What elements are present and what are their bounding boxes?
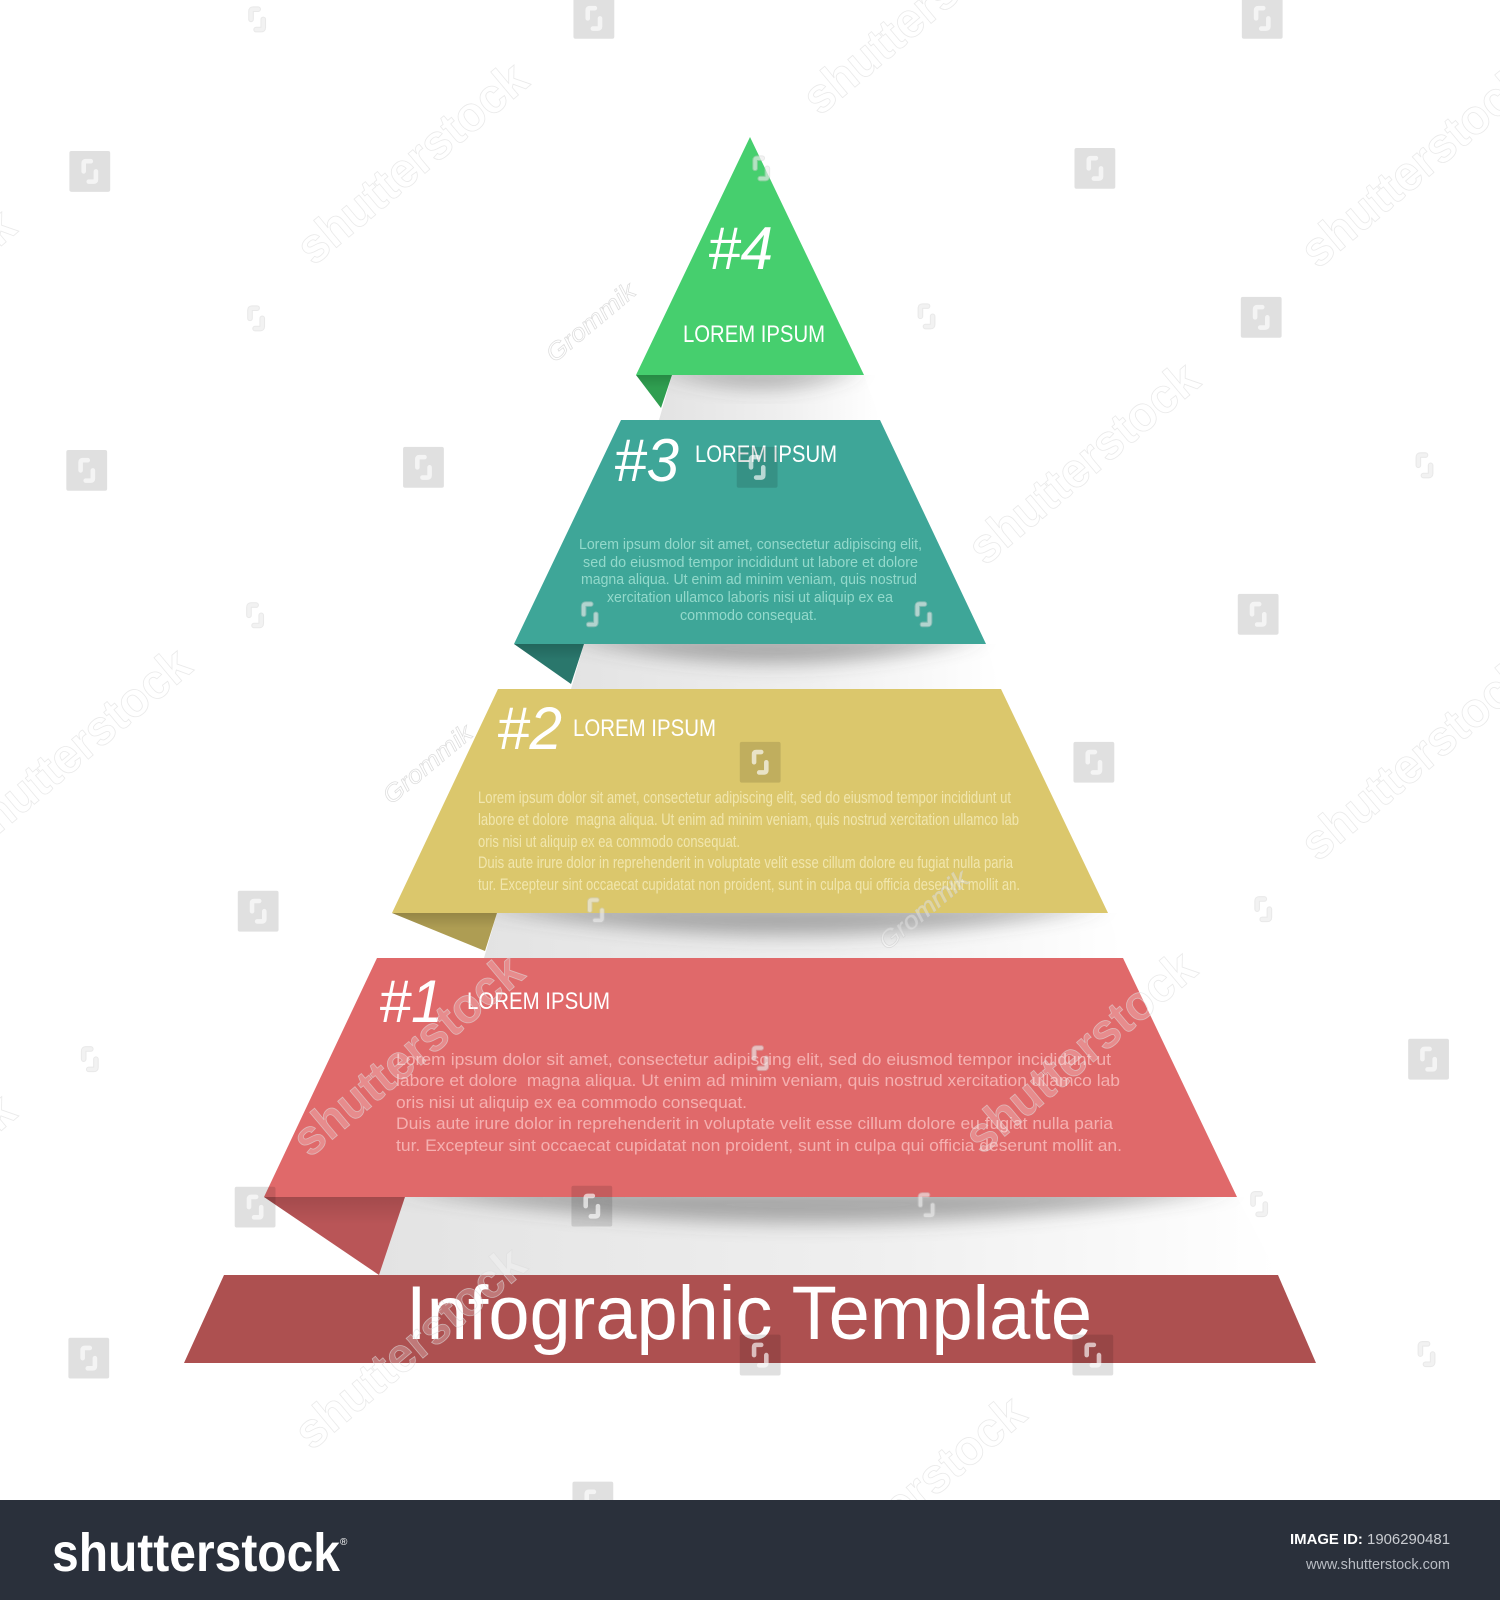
tier 2 paragraph: oris nisi ut aliquip ex ea commodo consequat. xyxy=(478,833,740,851)
tier 2 paragraph: labore et dolore magna aliqua. Ut enim ad minim veniam, quis nostrud xercitation ullamco lab xyxy=(478,811,1019,829)
tier 1 paragraph: Duis aute irure dolor in reprehenderit in voluptate velit esse cillum dolore eu fugiat nulla paria xyxy=(396,1114,1114,1133)
logo registered mark: ® xyxy=(340,1537,348,1548)
watermark layer: shutterstock xyxy=(282,943,535,1167)
tier 1 paragraph: labore et dolore magna aliqua. Ut enim ad minim veniam, quis nostrud xercitation ullamco lab xyxy=(396,1071,1120,1090)
tier 1 heading: LOREM IPSUM xyxy=(467,988,610,1015)
title: Infographic Template xyxy=(406,1271,1092,1356)
tier 3 paragraph: xercitation ullamco laboris nisi ut aliquip ex ea xyxy=(607,590,894,606)
footer bar xyxy=(0,1500,1500,1600)
watermark layer: Grommik xyxy=(378,718,479,810)
tier 3 paragraph: sed do eiusmod tempor incididunt ut labore et dolore xyxy=(583,555,918,571)
tier 2 paragraph: Duis aute irure dolor in reprehenderit in voluptate velit esse cillum dolore eu fugiat nulla paria xyxy=(478,854,1014,872)
watermark layer: shutterstock xyxy=(286,51,539,275)
panel: tier 2 yellow xyxy=(392,689,1123,958)
panel: tier 1 red xyxy=(264,958,1278,1275)
tier 4 number: #4 xyxy=(708,215,773,282)
tier 1 paragraph xyxy=(396,1050,1122,1155)
watermark layer: shutterstock xyxy=(284,1236,537,1460)
tier 4 heading: LOREM IPSUM xyxy=(683,321,825,348)
tier 2 heading: LOREM IPSUM xyxy=(573,715,716,742)
watermark layer: Grommik xyxy=(874,864,975,956)
title banner xyxy=(184,1271,1316,1363)
tier 1 paragraph: Lorem ipsum dolor sit amet, consectetur adipiscing elit, sed do eiusmod tempor incididunt ut xyxy=(396,1050,1111,1069)
tier 1 paragraph: oris nisi ut aliquip ex ea commodo consequat. xyxy=(396,1093,747,1112)
panel: tier 4 green apex xyxy=(636,137,880,420)
tier 3 heading: LOREM IPSUM xyxy=(695,441,837,468)
panel: tier 3 teal xyxy=(514,420,1000,689)
watermark layer: Grommik xyxy=(541,276,643,368)
tier 2 paragraph xyxy=(478,789,1020,894)
tier 3 paragraph: Lorem ipsum dolor sit amet, consectetur adipiscing elit, xyxy=(579,537,922,553)
tier 3 paragraph xyxy=(579,537,922,624)
tier 2 number: #2 xyxy=(497,695,562,762)
footer logo: shutterstock xyxy=(52,1523,341,1583)
tier 2 paragraph: Lorem ipsum dolor sit amet, consectetur adipiscing elit, sed do eiusmod tempor incididunt ut xyxy=(478,789,1011,807)
tier 1 number: #1 xyxy=(379,968,443,1035)
tier 3 paragraph: magna aliqua. Ut enim ad minim veniam, quis nostrud xyxy=(581,572,917,588)
tier 1 paragraph: tur. Excepteur sint occaecat cupidatat non proident, sunt in culpa qui officia deserunt mollit an. xyxy=(396,1136,1122,1155)
watermark layer: shutterstock xyxy=(958,351,1210,575)
website: www.shutterstock.com xyxy=(1305,1556,1450,1573)
tier 3 paragraph: commodo consequat. xyxy=(680,608,817,624)
watermark layer: shutterstock xyxy=(955,940,1207,1164)
image id: IMAGE ID: 1906290481 xyxy=(1290,1531,1450,1548)
tier 2 paragraph: tur. Excepteur sint occaecat cupidatat non proident, sunt in culpa qui officia deserunt mollit an. xyxy=(478,876,1020,894)
tier 3 number: #3 xyxy=(614,427,679,494)
